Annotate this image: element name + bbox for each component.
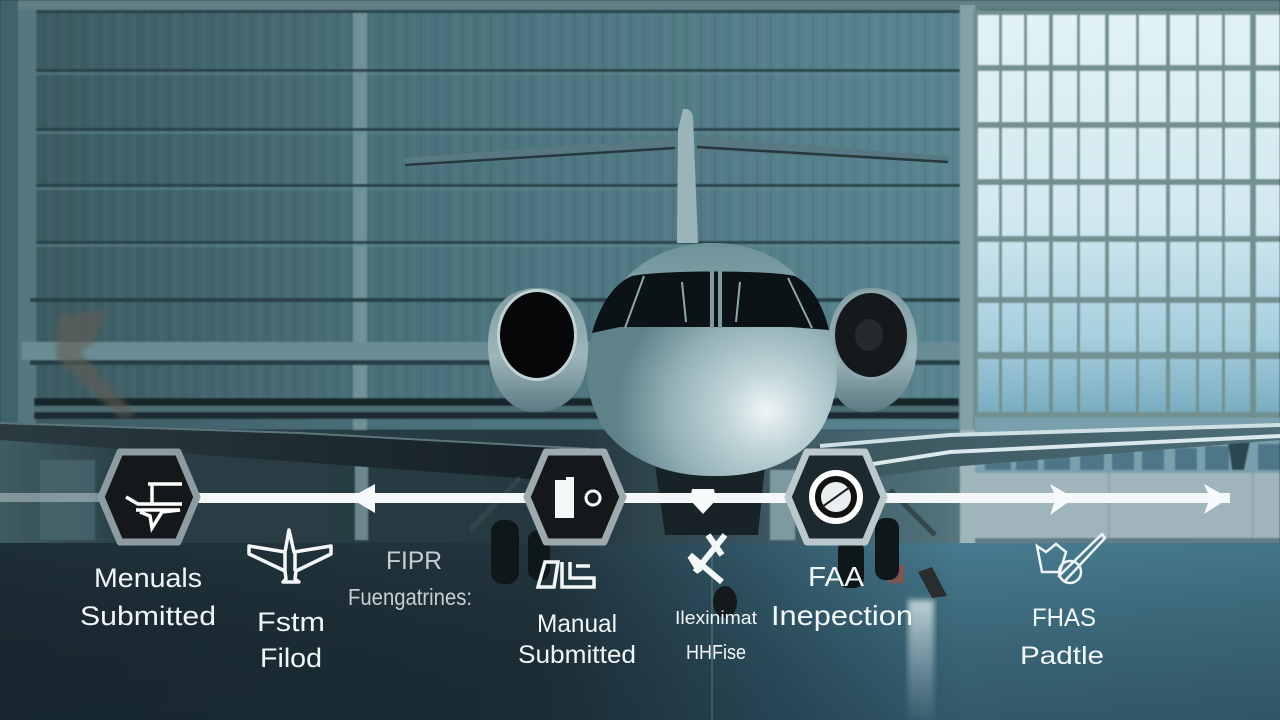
tail stabilizer — [403, 136, 948, 167]
hangar background wall — [0, 0, 1280, 545]
right wing — [815, 424, 1280, 482]
wall stain figure — [56, 310, 136, 418]
right engine — [828, 288, 917, 412]
left engine — [488, 288, 588, 412]
step: fstm filod — [257, 607, 325, 673]
node: inspection hexagon — [788, 452, 884, 542]
step: faded label — [348, 547, 472, 610]
icon: workstation — [538, 562, 594, 587]
fuselage — [587, 243, 837, 476]
left main gear — [491, 520, 550, 584]
icon: airplane outline — [249, 530, 331, 582]
arrow: right pointing mid — [1050, 484, 1074, 515]
icon: documents — [555, 477, 574, 518]
step: faa approval — [1020, 604, 1104, 670]
arrow: right pointing end — [1204, 484, 1229, 514]
icon: gauge — [812, 473, 860, 521]
step: faded label: Fuengatrines: — [348, 584, 472, 610]
marker: diamond — [690, 489, 716, 514]
arrow: left pointing — [350, 484, 375, 513]
nose landing gear — [655, 465, 765, 535]
icon: aircraft top view — [126, 484, 182, 528]
right main gear — [838, 518, 899, 588]
step: small label: Ilexinimat — [675, 608, 757, 628]
icon: check and seal — [1037, 534, 1105, 583]
icon: wrench cross — [690, 535, 725, 582]
lower hangar door — [0, 418, 1280, 545]
step: manual submitted: Submitted — [518, 641, 636, 669]
step: menuals submitted: Menuals — [94, 563, 202, 593]
step: menuals submitted: Submitted — [80, 601, 216, 631]
node: manual hexagon — [527, 452, 623, 542]
step: manual submitted: Manual — [537, 610, 617, 638]
gear struts — [470, 478, 935, 535]
step: fstm filod: Filod — [260, 643, 322, 673]
step: small label — [675, 608, 757, 664]
process timeline — [0, 452, 1230, 542]
step: faa inspection: Inepection — [771, 600, 913, 631]
node: manuals hexagon — [101, 452, 197, 542]
step: fstm filod: Fstm — [257, 607, 325, 637]
hangar floor — [0, 543, 1280, 720]
step: faa approval: Padtle — [1020, 642, 1104, 670]
timeline bar — [0, 493, 1230, 503]
step: faa approval: FHAS — [1032, 604, 1096, 632]
step: faa inspection — [771, 561, 913, 631]
hangar window grid — [973, 10, 1280, 430]
windshield — [592, 272, 829, 333]
left wing — [0, 422, 595, 482]
floor objects — [713, 565, 947, 618]
step: faded label: FIPR — [386, 547, 442, 575]
step: manual submitted — [518, 610, 636, 669]
step: faa inspection: FAA — [808, 561, 864, 592]
step: small label: HHFise — [686, 642, 746, 664]
step: menuals submitted — [80, 563, 216, 631]
tail fin — [677, 109, 698, 243]
aircraft — [0, 109, 1280, 588]
